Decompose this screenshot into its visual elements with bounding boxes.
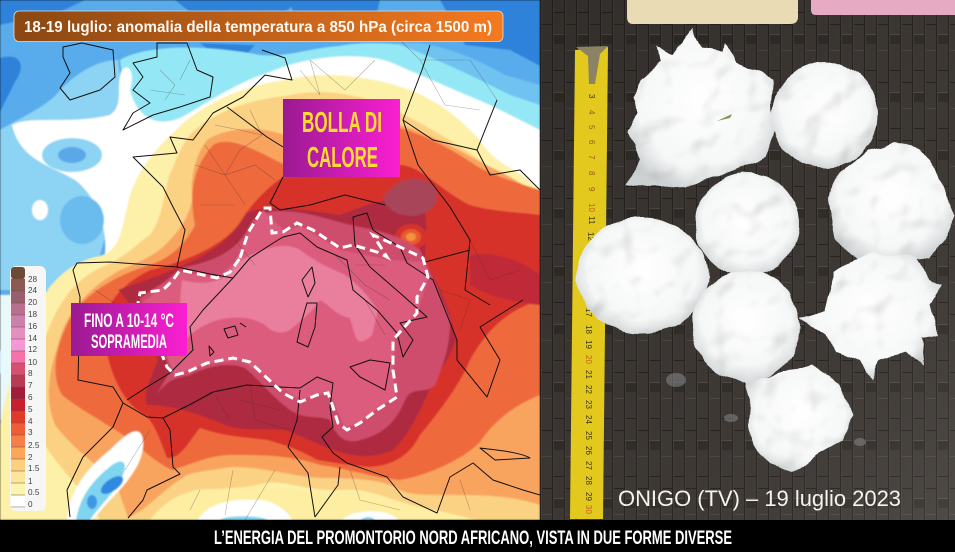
legend: temperature scale: 7 — [28, 381, 33, 390]
legend: temperature scale: 4 — [28, 417, 33, 426]
measuring tape: 7 — [587, 155, 596, 160]
coastlines and borders — [60, 43, 540, 518]
measuring tape: 10 — [587, 203, 596, 212]
label: anomaly up to 10-14 C: FINO A 10-14 °C — [84, 311, 174, 332]
panel: temperature anomaly map — [0, 0, 540, 520]
legend: temperature scale: 2.5 — [28, 441, 40, 450]
label: anomaly up to 10-14 C: SOPRAMEDIA — [91, 332, 167, 353]
measuring tape: 11 — [587, 216, 596, 225]
measuring tape: 9 — [587, 187, 596, 192]
bottom caption bar — [0, 520, 955, 552]
hailstones — [576, 27, 955, 473]
bamboo mat background — [540, 0, 955, 520]
legend: temperature scale: 5 — [28, 405, 33, 414]
label: heat bubble — [283, 99, 400, 177]
measuring tape: 30 — [584, 505, 593, 514]
legend: temperature scale — [10, 266, 46, 511]
measuring tape: 27 — [584, 461, 593, 470]
label: anomaly up to 10-14 C — [71, 303, 187, 356]
melted hail residue — [666, 373, 866, 446]
measuring tape: 24 — [584, 415, 593, 424]
pink object at top — [811, 0, 955, 15]
legend: temperature scale: 16 — [28, 322, 38, 331]
legend: temperature scale: 6 — [28, 393, 33, 402]
province lines — [95, 40, 520, 520]
legend: temperature scale: 12 — [28, 345, 38, 354]
legend: temperature scale: 28 — [28, 275, 38, 284]
measuring tape: 28 — [584, 476, 593, 485]
measuring tape: 29 — [584, 492, 593, 501]
legend: temperature scale: 20 — [28, 298, 38, 307]
legend: temperature scale: 1.5 — [28, 464, 40, 473]
legend: temperature scale: 0.5 — [28, 488, 40, 497]
measuring tape: 26 — [584, 446, 593, 455]
legend: temperature scale: 18 — [28, 310, 38, 319]
photo caption: ONIGO (TV) – 19 luglio 2023 — [618, 486, 901, 511]
legend: temperature scale: 1 — [28, 477, 33, 486]
map colour field — [0, 0, 540, 520]
measuring tape: 3 — [587, 94, 596, 99]
blade of grass on hailstone — [717, 114, 732, 121]
measuring tape: 8 — [587, 171, 596, 176]
measuring tape: 22 — [584, 385, 593, 394]
legend: temperature scale: 0 — [28, 500, 33, 509]
legend: temperature scale: 2 — [28, 453, 33, 462]
measuring tape — [570, 46, 608, 519]
legend: temperature scale: 10 — [28, 358, 38, 367]
label: heat bubble: BOLLA DI — [302, 107, 382, 139]
cream object at top — [627, 0, 798, 24]
measuring tape: 25 — [584, 431, 593, 440]
legend: temperature scale: 8 — [28, 369, 33, 378]
measuring tape: 19 — [584, 340, 593, 349]
measuring tape: 5 — [587, 125, 596, 130]
title bar — [14, 11, 503, 42]
legend: temperature scale: 24 — [28, 286, 38, 295]
measuring tape: 4 — [587, 110, 596, 115]
measuring tape: 20 — [584, 355, 593, 364]
measuring tape: 23 — [584, 400, 593, 409]
measuring tape: 18 — [584, 325, 593, 334]
legend: temperature scale: 3 — [28, 428, 33, 437]
measuring tape: 17 — [584, 308, 593, 317]
label: heat bubble: CALORE — [307, 142, 378, 174]
measuring tape: 6 — [587, 140, 596, 145]
title bar: 18-19 luglio: anomalia della temperatura a 850 hPa (circa 1500 m) — [24, 19, 492, 36]
legend: temperature scale: 14 — [28, 334, 38, 343]
measuring tape: 12 — [586, 232, 595, 241]
measuring tape: 21 — [584, 370, 593, 379]
dashed outline: strongest anomaly — [138, 208, 428, 430]
panel: hailstones photo — [540, 0, 955, 520]
